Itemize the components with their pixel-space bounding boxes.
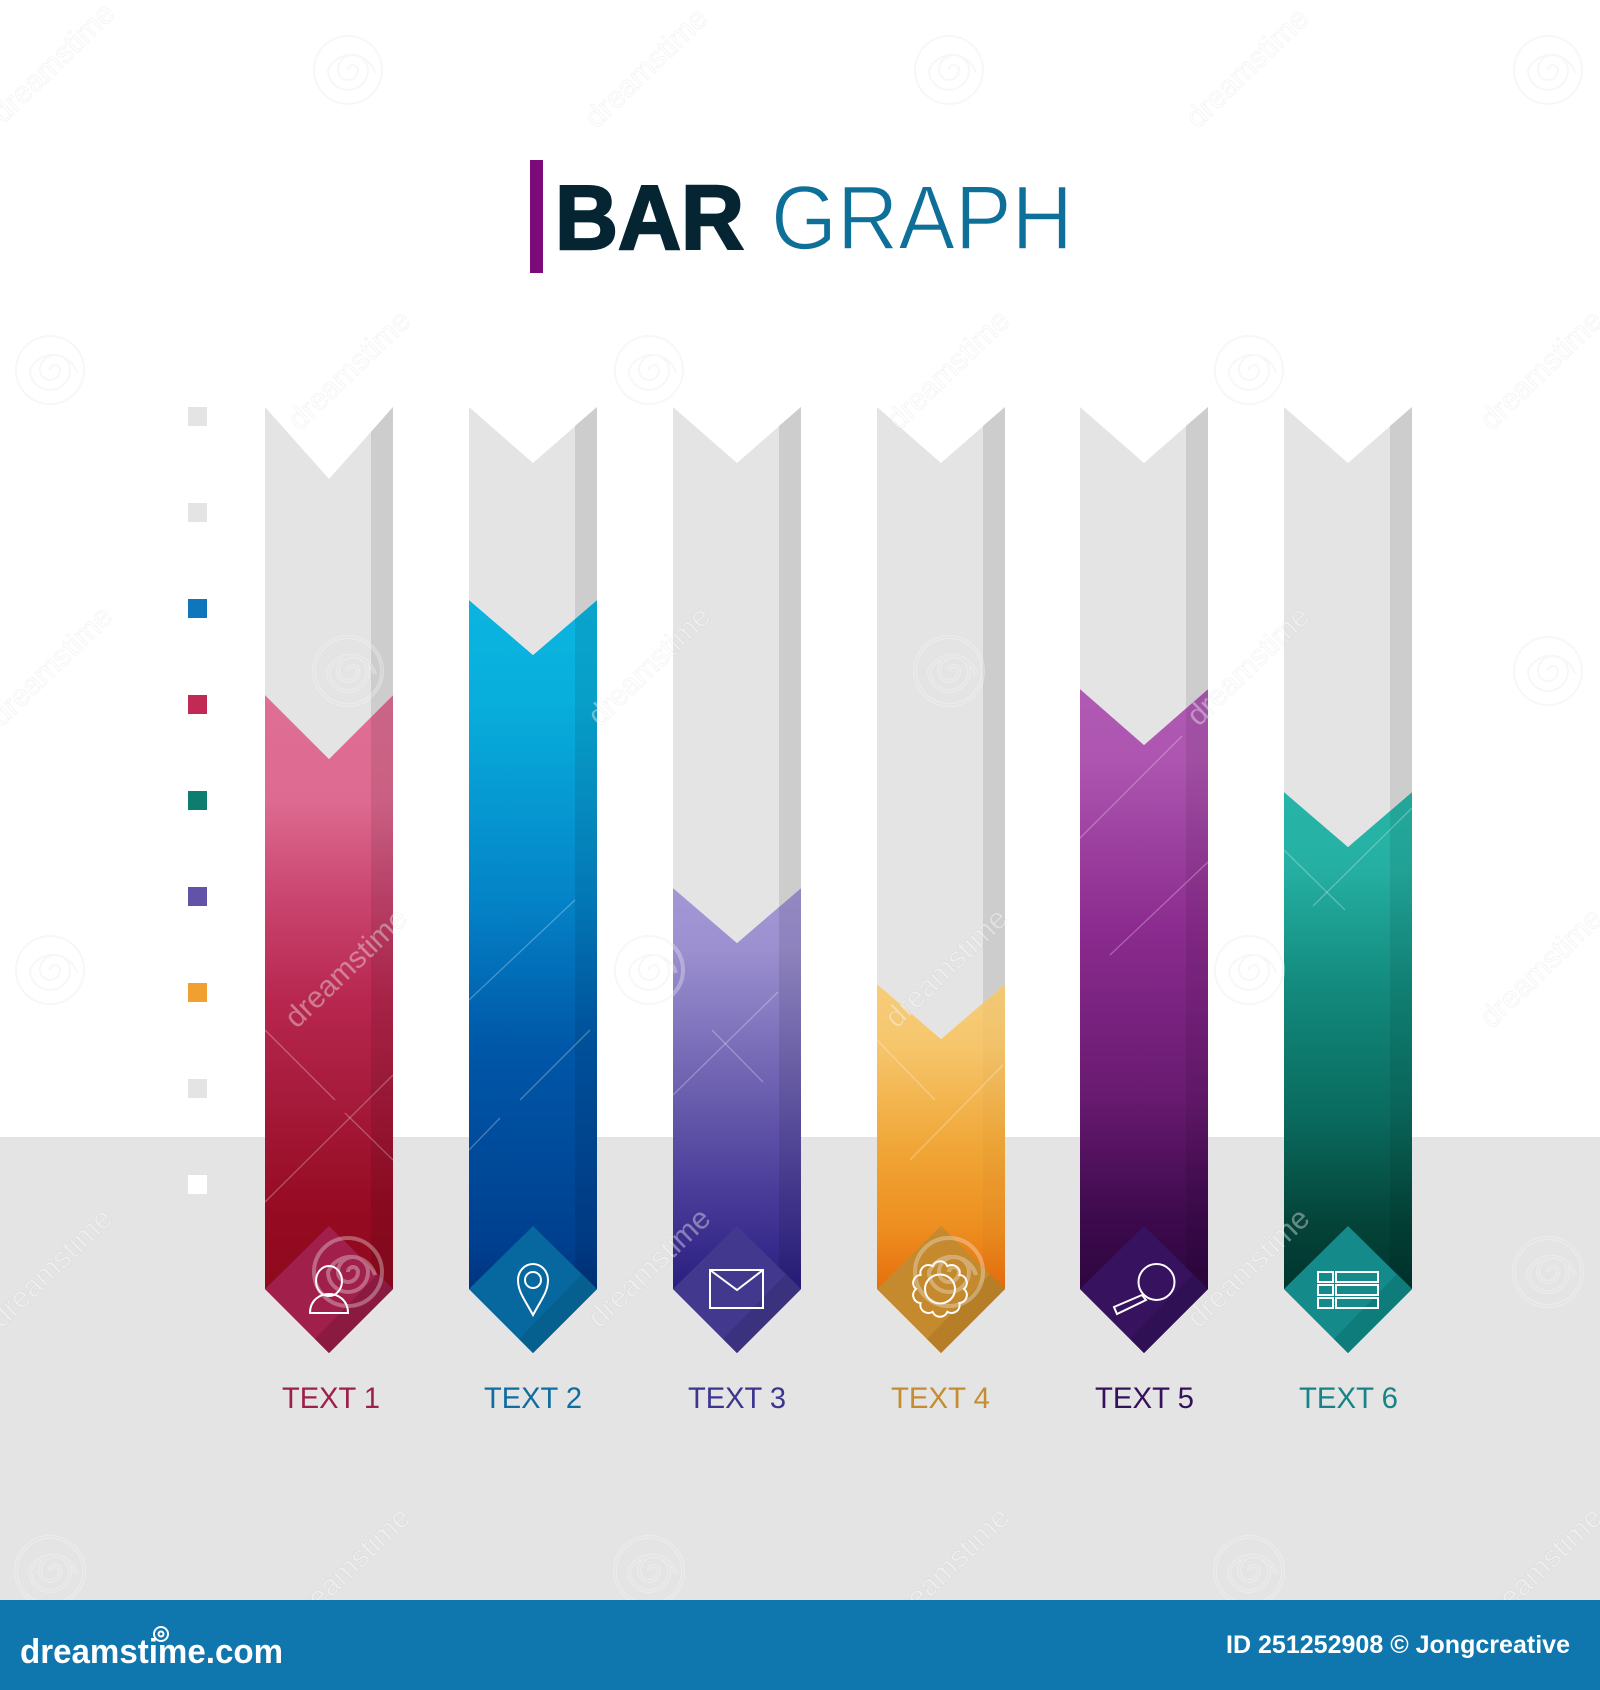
watermark text: dreamstime	[1181, 600, 1316, 732]
watermark text: dreamstime	[1181, 1202, 1316, 1334]
footer logo text: dreamstime.com	[20, 1633, 283, 1671]
footer logo spiral	[154, 1627, 168, 1641]
watermark text: dreamstime	[582, 600, 717, 732]
grey track	[673, 407, 801, 943]
bar 2: TEXT 2	[469, 407, 597, 1415]
label: TEXT 3	[688, 1382, 786, 1415]
diamond badge	[1080, 1226, 1208, 1353]
grey track	[469, 407, 597, 655]
watermark text: dreamstime	[582, 1202, 717, 1334]
icon: gear	[913, 1261, 967, 1317]
grey track	[1284, 407, 1412, 847]
watermark text: dreamstime	[282, 304, 417, 436]
icon: person	[310, 1266, 348, 1313]
coloured fill	[1080, 689, 1208, 1353]
bar 3: TEXT 3	[673, 407, 801, 1415]
coloured fill	[265, 695, 393, 1353]
watermark hairlines	[265, 736, 1412, 1202]
diamond badge	[265, 1226, 393, 1353]
diamond badge	[1284, 1226, 1412, 1353]
background band	[0, 1137, 1600, 1600]
diamond badge	[673, 1226, 801, 1353]
diamond badge	[877, 1226, 1005, 1353]
axis scale squares	[188, 407, 207, 1194]
icon: envelope	[710, 1270, 763, 1308]
label: TEXT 5	[1095, 1382, 1194, 1415]
icon: magnifier	[1114, 1264, 1174, 1314]
coloured fill	[469, 600, 597, 1353]
coloured fill	[1284, 792, 1412, 1353]
grey track	[877, 407, 1005, 1039]
watermark text: dreamstime	[879, 902, 1014, 1034]
bar 4: TEXT 4	[877, 407, 1005, 1415]
grey track	[1080, 407, 1208, 745]
watermark text: dreamstime	[282, 1501, 417, 1633]
footer image id: ID 251252908 © Jongcreative	[1226, 1631, 1570, 1659]
label: TEXT 2	[484, 1382, 582, 1415]
title	[530, 160, 1073, 273]
label: TEXT 6	[1299, 1382, 1398, 1415]
icon: location pin	[518, 1264, 548, 1315]
title word: GRAPH: GRAPH	[771, 168, 1073, 269]
label: TEXT 4	[891, 1382, 990, 1415]
bar 1: TEXT 1	[265, 407, 393, 1415]
diamond badge	[469, 1226, 597, 1353]
bar 6: TEXT 6	[1284, 407, 1412, 1415]
watermark text: dreamstime	[279, 902, 414, 1034]
watermark text: dreamstime	[1180, 2, 1315, 134]
coloured fill	[877, 984, 1005, 1353]
title word: BAR: BAR	[555, 168, 744, 269]
coloured fill	[673, 888, 801, 1353]
bar 5: TEXT 5	[1080, 407, 1208, 1415]
watermark text: dreamstime	[579, 2, 714, 134]
watermark text: dreamstime	[881, 1501, 1016, 1633]
label: TEXT 1	[282, 1382, 380, 1415]
watermark text: dreamstime	[881, 304, 1016, 436]
grey track	[265, 407, 393, 759]
icon: table	[1318, 1272, 1378, 1308]
footer bar	[0, 1600, 1600, 1690]
title accent bar	[530, 160, 543, 273]
